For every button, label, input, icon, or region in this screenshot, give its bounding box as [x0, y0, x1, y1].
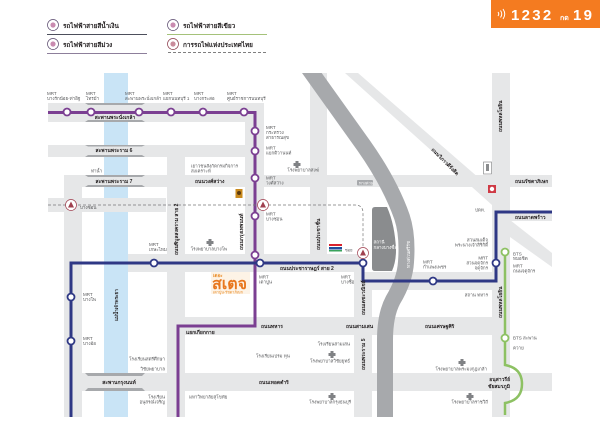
road labels: ถนนวิภาวดีรังสิต — [430, 146, 460, 177]
place labels: โรงเรียน — [148, 394, 165, 400]
legend: purple line: รถไฟฟ้าสายสีม่วง — [63, 40, 112, 49]
station labels: BTS — [513, 252, 522, 256]
station labels: พระนางเจ้าสิริกิติ์ — [455, 240, 489, 248]
station labels: MRT — [47, 91, 57, 96]
call center banner: 19 — [573, 7, 594, 24]
station labels: สวนจตุจักร — [466, 260, 489, 266]
station labels: สงเคราะห์ — [191, 168, 211, 174]
station labels: MRT — [266, 125, 276, 130]
road labels: ถนนประชาราษฎร์ สาย 2 — [280, 265, 334, 272]
station labels: MRT — [266, 212, 276, 216]
expressway — [304, 62, 406, 420]
station labels: วงศ์สว่าง — [266, 180, 284, 186]
legend: blue line: รถไฟฟ้าสายสีน้ำเงิน — [63, 20, 120, 30]
station labels: จตุจักร — [475, 266, 489, 272]
station labels: บางกระสอ — [194, 96, 215, 101]
road labels: แยกเกียกกาย — [186, 329, 215, 336]
station labels: แยกติวานนท์ — [266, 150, 291, 156]
railway line — [48, 205, 363, 253]
road labels: สะพานกรุงนนท์ — [102, 379, 136, 386]
road network — [48, 73, 552, 417]
station labels: MRT — [83, 292, 93, 297]
call center banner: กด — [560, 15, 569, 22]
legend: purple line — [47, 38, 147, 54]
call center banner — [491, 0, 600, 28]
road labels: ถนนพหลโยธิน — [497, 286, 504, 318]
place labels: โรงพยาบาลกรุงธนบุรี — [309, 398, 352, 406]
station labels: บางซ่อน — [266, 216, 282, 222]
road labels: ถนนรัชดาภิเษก — [515, 178, 548, 185]
expressway tag: ทางด่วน — [359, 180, 374, 186]
place labels: โรงพยาบาลวิชัยยุทธ์ — [310, 358, 350, 364]
road labels: ถนนเศรษฐศิริ — [425, 323, 455, 330]
station labels: บางรักน้อย-ท่าอิฐ — [47, 96, 81, 102]
station labels: ปตท. — [475, 208, 485, 212]
green line — [505, 252, 522, 415]
station labels: โรงพยาบาลสงฆ์ — [287, 166, 319, 172]
legend: green line: รถไฟฟ้าสายสีเขียว — [183, 21, 236, 30]
legend: state railway — [168, 38, 267, 52]
station labels: โรงพยาบาลบางโพ — [191, 246, 227, 252]
road labels — [95, 100, 548, 391]
road labels: ถนนพิบูลสงคราม สาย 2 — [173, 203, 181, 255]
place labels: วิชัยพยาบาล — [140, 366, 165, 372]
station labels: MRT — [341, 274, 351, 280]
place labels — [129, 340, 488, 406]
road labels: ทางด่วนศรีรัช — [406, 241, 411, 268]
station labels: บางโพ — [83, 296, 96, 302]
road labels: สะพานพระนั่งเกล้า — [95, 113, 135, 121]
station labels: MRT — [259, 274, 269, 280]
station labels: MRT — [266, 176, 276, 180]
road labels: แม่น้ำเจ้าพระยา — [112, 289, 119, 321]
road labels: ถนนวงศ์สว่าง — [195, 178, 225, 185]
call center banner: 1232 — [511, 7, 554, 24]
road labels: ถนนเตชะวณิชย์ — [360, 280, 367, 315]
legend: green line — [167, 20, 267, 35]
station labels: หมอชิต — [513, 256, 528, 261]
place labels: โรงพยาบาลพระมงกุฎเกล้า — [435, 366, 487, 372]
station labels: MRT — [194, 91, 204, 96]
bridge edges — [85, 103, 145, 391]
road labels: ถนนพระราม 5 — [361, 338, 367, 370]
station labels: MRT — [125, 91, 135, 96]
station labels: สาธารณสุข — [266, 135, 289, 141]
road labels: ถนนเทอดดำริ — [259, 379, 289, 386]
project logo: สเตจ — [212, 276, 247, 293]
station labels: MRT — [149, 242, 159, 247]
station labels: ควาย — [513, 346, 524, 350]
purple line — [48, 112, 255, 417]
station labels: บางซื่อ — [341, 278, 355, 284]
station labels: MRT — [163, 91, 173, 96]
river — [104, 73, 128, 417]
station labels: กำแพงเพชร — [423, 264, 447, 270]
station labels: MRT — [86, 91, 96, 96]
road labels: อนุสาวรีย์ — [489, 376, 510, 383]
road labels: ถนนสามเสน — [346, 324, 374, 330]
place labels: โรงเรียนสามเสน — [318, 340, 350, 346]
road labels: ชัยสมรภูมิ — [488, 383, 510, 391]
project logo — [211, 272, 250, 294]
landmark icons — [236, 162, 496, 252]
station labels: ท่าน้ำ — [91, 168, 103, 174]
station labels: เกษะไหม — [149, 247, 167, 252]
station labels: MRT — [513, 264, 523, 268]
road labels: สะพานพระราม 6 — [96, 148, 133, 154]
station labels: ศูนย์ราชการนนทบุรี — [227, 95, 266, 102]
place labels: โรงเรียนเปรม ทุน — [256, 352, 290, 360]
railway station icons — [66, 200, 368, 258]
station labels: เยาวชนสังกัดกรมกิจการ — [191, 164, 239, 168]
road labels: ถนนลาดพร้าว — [515, 214, 546, 221]
project logo: เดอะ — [213, 273, 223, 278]
station labels: BTS สะพาน — [513, 336, 537, 340]
station labels: บางอ้อ — [83, 341, 96, 346]
station labels: บางซ่อน — [80, 205, 96, 210]
station labels: MRT — [423, 260, 433, 264]
road labels: ถนนประชาชื่น — [314, 218, 322, 250]
station labels: MRT — [478, 256, 488, 260]
legend — [47, 20, 267, 54]
legend: state railway: การรถไฟแห่งประเทศไทย — [183, 40, 253, 49]
station labels: กระทรวง — [266, 130, 284, 135]
station labels: ถนนจตุจักร — [513, 268, 536, 274]
station labels: สถาน ทหาร — [465, 292, 489, 298]
place labels: โรงพยาบาลราชวิถี — [451, 398, 488, 404]
Bang Sue grand station block: สถานี — [374, 240, 385, 244]
station labels: แยกนนทบุรี 1 — [163, 96, 190, 102]
hospital icons — [206, 161, 474, 400]
Bang Sue grand station block: กลางบางซื่อ — [374, 244, 397, 250]
station labels: MRT — [266, 146, 276, 150]
project logo: เตาปูน-รัชดาภิเษก — [213, 290, 243, 294]
station labels: เตาปูน — [259, 280, 272, 286]
place labels: โรงเรียนสตรีศึกษา — [129, 356, 165, 362]
road labels: สะพานพระราม 7 — [96, 179, 133, 185]
stations — [64, 108, 508, 344]
blue line — [71, 212, 552, 417]
landmark icons: ซอย — [345, 248, 352, 252]
place labels: อนุสรณ์เจริญ — [139, 398, 165, 406]
place labels: มหาวิทยาลัยสุโขทัย — [189, 394, 228, 400]
legend: blue line — [47, 20, 147, 35]
station labels — [47, 91, 537, 350]
station labels: สวนสมเด็จ — [467, 236, 488, 242]
Bang Sue grand station block — [372, 207, 397, 271]
road labels: ถนนทหาร — [261, 324, 283, 330]
station labels: MRT — [227, 91, 237, 96]
station labels: MRT — [83, 336, 93, 341]
station labels: สะพานพระนั่งเกล้า — [125, 95, 162, 101]
station labels: ไทรม้า — [85, 96, 100, 101]
road labels: ถนนกรุงเทพนนท์ — [238, 213, 245, 250]
road labels: ถนนพหลโยธิน — [497, 100, 504, 132]
